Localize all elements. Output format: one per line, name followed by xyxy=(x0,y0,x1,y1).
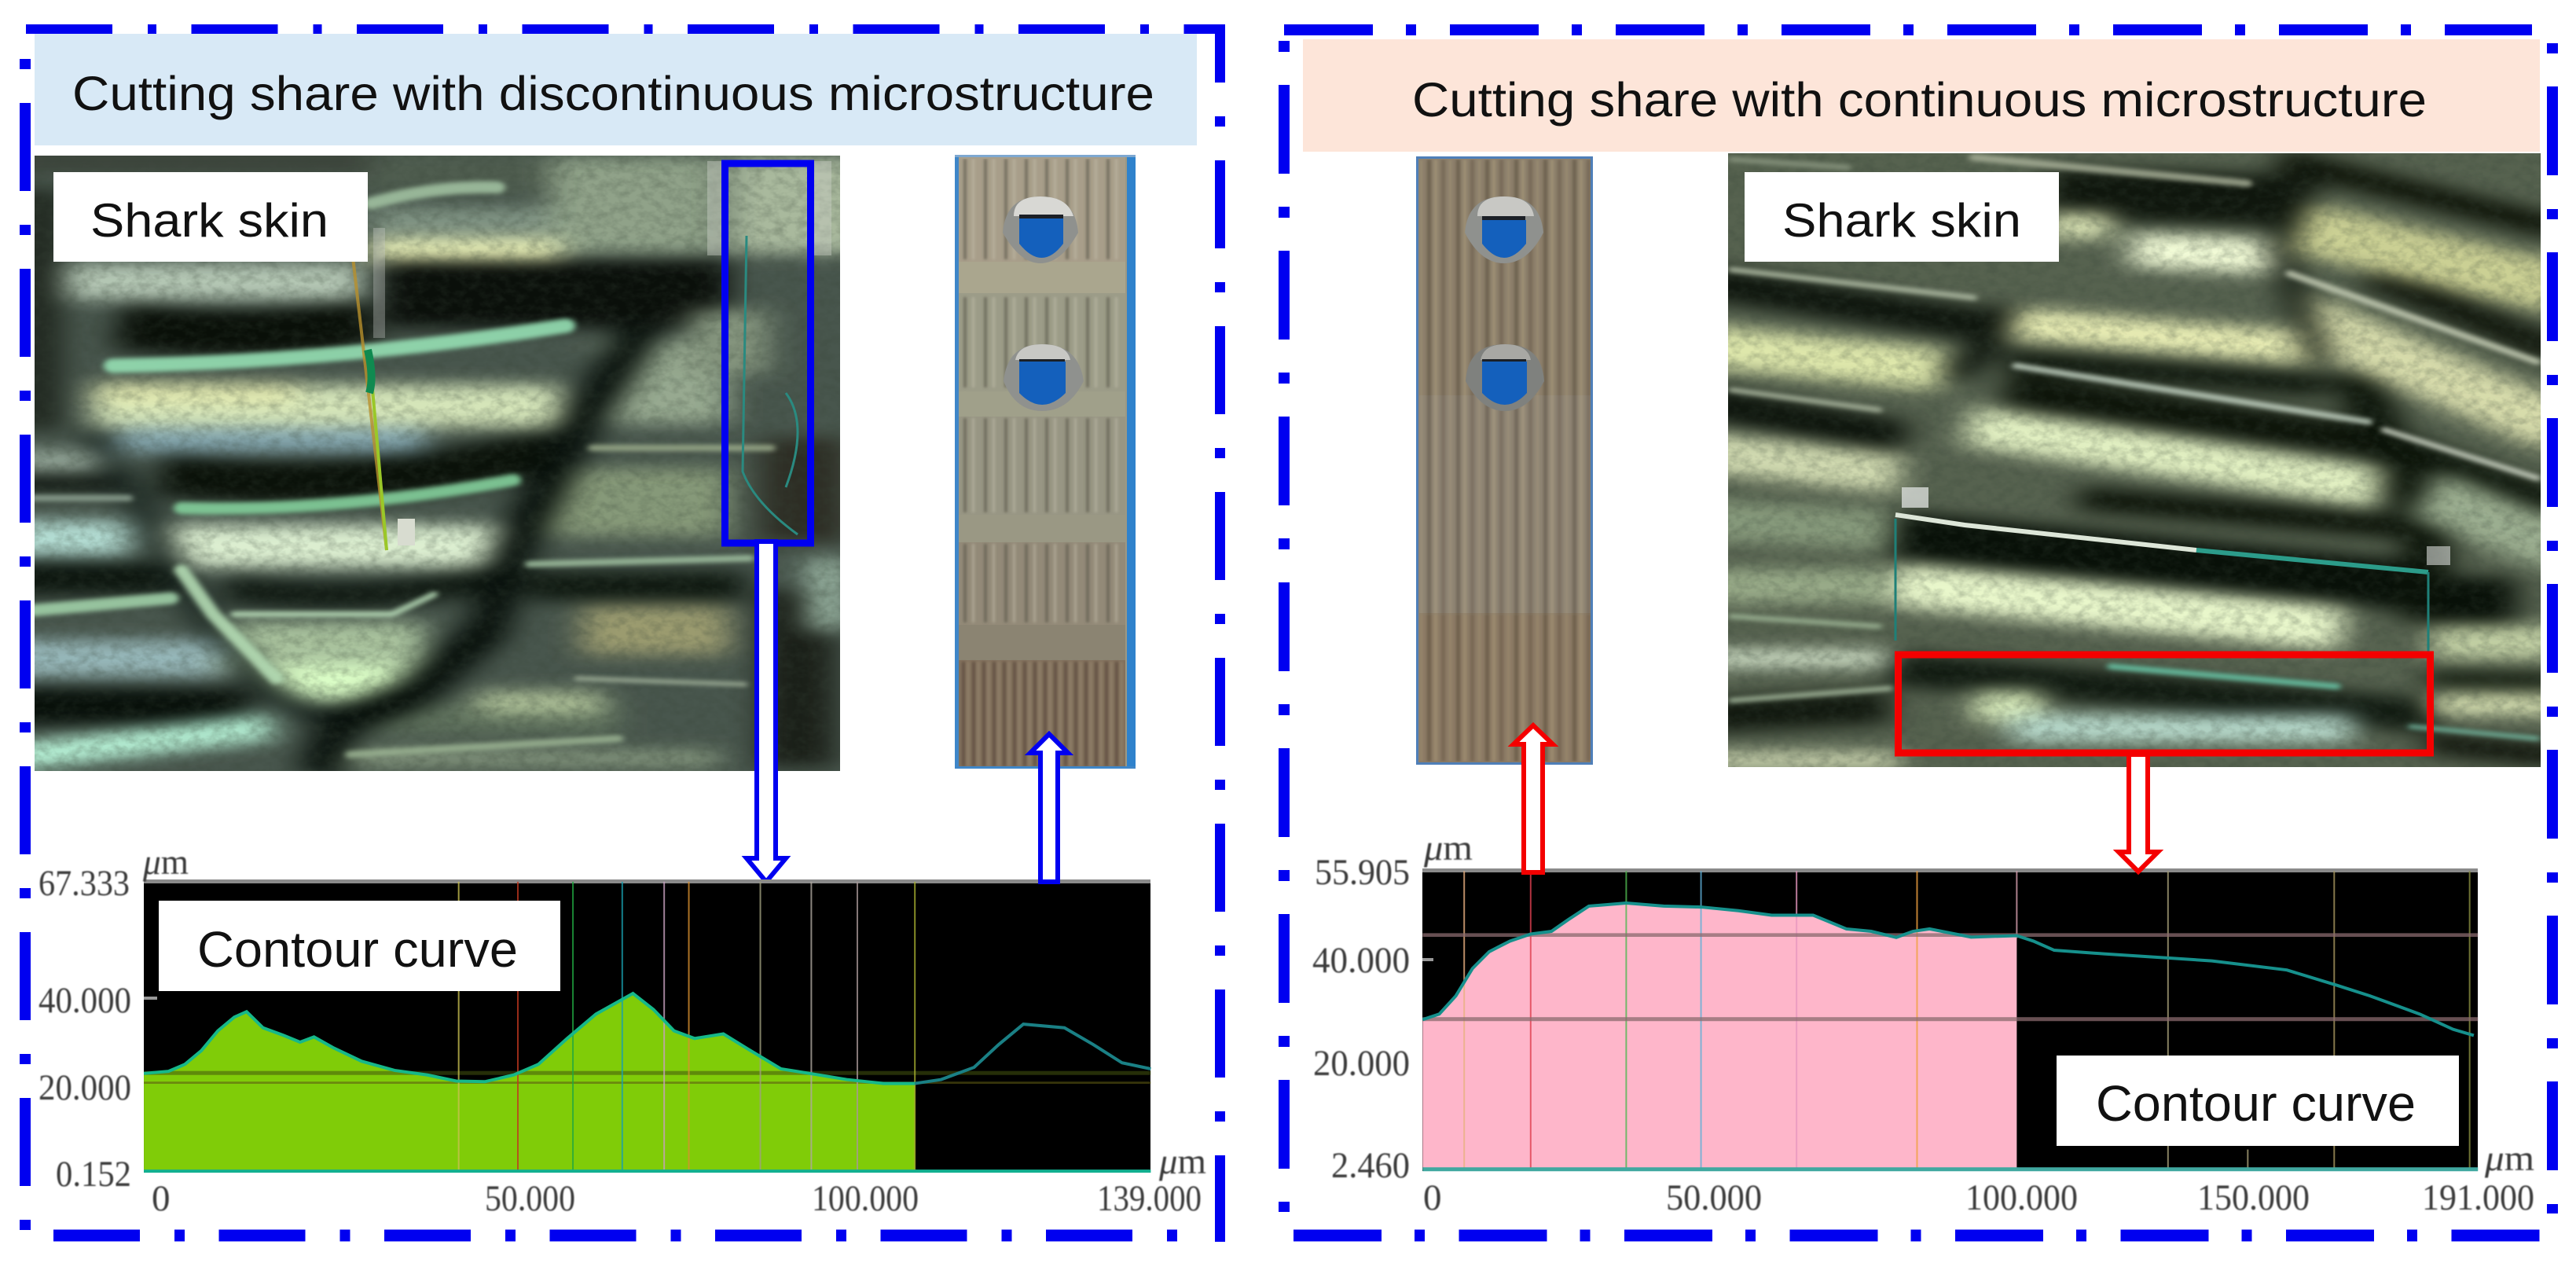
photo: shark skin discontinuous xyxy=(35,156,840,771)
axis labels: left chart: 20.000 xyxy=(39,1067,131,1108)
photo: cutting share plate discontinuous xyxy=(955,155,1136,769)
callout: contour curve label: Contour curve xyxy=(197,921,518,978)
axis labels: right chart: μm xyxy=(1423,828,1473,868)
panel: discontinuous microstructure xyxy=(0,24,1225,1242)
axis labels: right chart xyxy=(1312,828,2534,1218)
icon: hole 1 xyxy=(1003,196,1078,263)
axis labels: right chart: 20.000 xyxy=(1313,1043,1410,1084)
chart: contour curve continuous xyxy=(1422,868,2478,1171)
axis labels: right chart: 55.905 xyxy=(1315,852,1410,893)
axis labels: right chart: 191.000 xyxy=(2422,1177,2534,1218)
axis labels: right chart: 100.000 xyxy=(1965,1177,2078,1218)
header band: discontinuous xyxy=(35,34,1197,145)
axis labels: left chart: 139.000 xyxy=(1097,1178,1202,1219)
axis labels: left chart: 100.000 xyxy=(812,1178,919,1219)
callout: contour curve label xyxy=(2057,1056,2459,1146)
header band: continuous xyxy=(1303,39,2540,152)
axis labels: right chart: 2.460 xyxy=(1331,1145,1410,1186)
panel: continuous microstructure xyxy=(1284,30,2576,1235)
axis labels: left chart: μm xyxy=(142,842,189,882)
filled area: pink xyxy=(1422,903,2016,1170)
callout: shark skin label: Shark skin xyxy=(90,194,328,247)
callout: shark skin label xyxy=(53,172,368,262)
photo: shark skin continuous xyxy=(1728,153,2541,767)
callout: contour curve label xyxy=(159,901,560,991)
axis labels: left chart: 0.152 xyxy=(56,1154,131,1195)
icon: hole 2 xyxy=(1466,344,1544,411)
arrow: blue up to plate xyxy=(1030,734,1068,882)
callout: contour curve label: Contour curve xyxy=(2096,1075,2416,1132)
axis labels: left chart: 40.000 xyxy=(39,980,131,1021)
axis labels: left chart: 50.000 xyxy=(485,1178,575,1219)
arrow: red down to contour xyxy=(2119,754,2158,872)
callout: shark skin label xyxy=(1745,172,2059,262)
axis labels: left chart xyxy=(39,842,1206,1219)
axis labels: left chart: μm xyxy=(1158,1141,1206,1181)
header band: continuous: Cutting share with continuous microstructure xyxy=(1412,73,2427,127)
filled area: green xyxy=(144,993,915,1171)
highlight box: blue xyxy=(725,163,811,543)
chart: contour curve discontinuous xyxy=(144,879,1150,1173)
axis labels: right chart: 50.000 xyxy=(1666,1177,1762,1218)
panel frame: left dash-dot border xyxy=(25,24,1225,1242)
axis labels: right chart: μm xyxy=(2484,1138,2534,1178)
callout: shark skin label: Shark skin xyxy=(1782,194,2021,247)
icon: hole 2 xyxy=(1004,344,1084,411)
highlight box: red xyxy=(1899,655,2430,753)
axis labels: left chart: 0 xyxy=(152,1178,170,1219)
axis labels: left chart: 67.333 xyxy=(39,863,130,904)
axis labels: right chart: 150.000 xyxy=(2197,1177,2310,1218)
header band: discontinuous: Cutting share with discontinuous microstructure xyxy=(72,67,1154,120)
photo: cutting share plate continuous xyxy=(1418,157,1592,764)
arrow: blue down to contour xyxy=(747,542,786,882)
icon: hole 1 xyxy=(1465,196,1543,263)
axis labels: right chart: 0 xyxy=(1423,1177,1441,1218)
panel frame: right dash-dot border xyxy=(1284,30,2552,1235)
arrow: red up to plate xyxy=(1514,725,1553,872)
axis labels: right chart: 40.000 xyxy=(1312,940,1410,981)
